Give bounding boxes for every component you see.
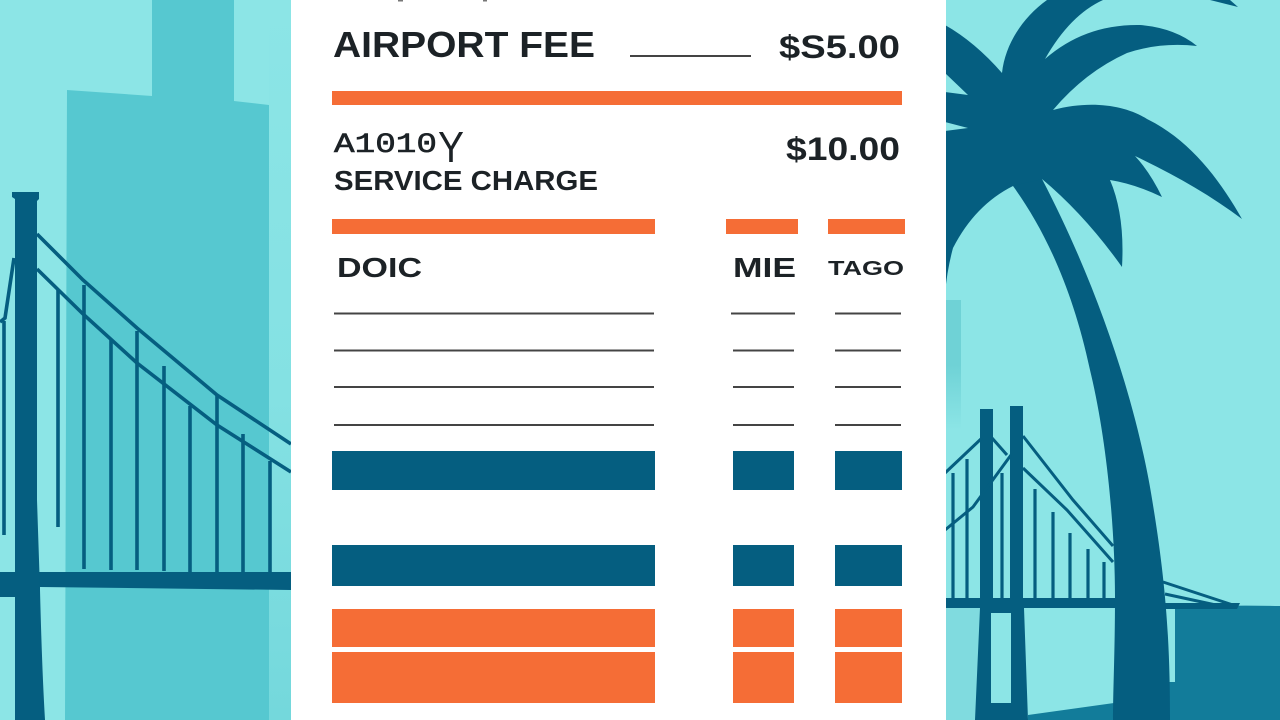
cropped text remnants bbox=[398, 0, 487, 2]
table header labels: MIE bbox=[733, 252, 796, 283]
panel: left city and bridge scene bbox=[0, 0, 291, 720]
garbled code bbox=[334, 123, 464, 172]
garbled code: A1010 bbox=[334, 130, 437, 161]
airport fee amount: $S5.00 bbox=[779, 29, 900, 65]
far deck bbox=[1160, 603, 1240, 609]
table header labels bbox=[337, 252, 904, 283]
service charge row bbox=[334, 123, 900, 196]
orange table bars bbox=[332, 609, 902, 703]
garbled code: Y bbox=[438, 123, 464, 172]
table header labels: TAGO bbox=[828, 258, 904, 280]
main cables bbox=[0, 234, 291, 472]
left suspension bridge bbox=[0, 192, 291, 720]
panel: white receipt bbox=[291, 0, 946, 720]
bridge tower bbox=[12, 192, 45, 720]
right suspension bridge bbox=[945, 406, 1240, 720]
airport fee label: AIRPORT FEE bbox=[333, 24, 595, 65]
bridge hangers bbox=[953, 459, 1104, 598]
navy table bars bbox=[332, 451, 902, 586]
orange divider bbox=[332, 91, 902, 105]
small frond tip bbox=[1210, 0, 1238, 7]
table header bars bbox=[332, 219, 905, 234]
fill line bbox=[630, 55, 751, 57]
receipt sheet bbox=[291, 0, 946, 720]
service charge label: SERVICE CHARGE bbox=[334, 165, 598, 196]
airport fee row bbox=[333, 24, 900, 65]
palm tree bbox=[945, 0, 1242, 720]
palm fronds bbox=[945, 0, 1242, 294]
table header labels: DOIC bbox=[337, 252, 422, 283]
empty table rows bbox=[334, 312, 901, 426]
panel: right palm and bridge scene bbox=[945, 0, 1280, 720]
building silhouette bbox=[65, 0, 269, 720]
bridge cables bbox=[945, 436, 1233, 607]
bridge hangers bbox=[4, 285, 270, 573]
bridge towers and lower frame bbox=[946, 406, 1115, 720]
bridge deck bbox=[0, 572, 291, 597]
water bbox=[1165, 606, 1280, 720]
lower shaded base bbox=[1028, 703, 1114, 720]
palm trunk bbox=[1005, 155, 1170, 720]
service charge amount: $10.00 bbox=[786, 131, 900, 167]
